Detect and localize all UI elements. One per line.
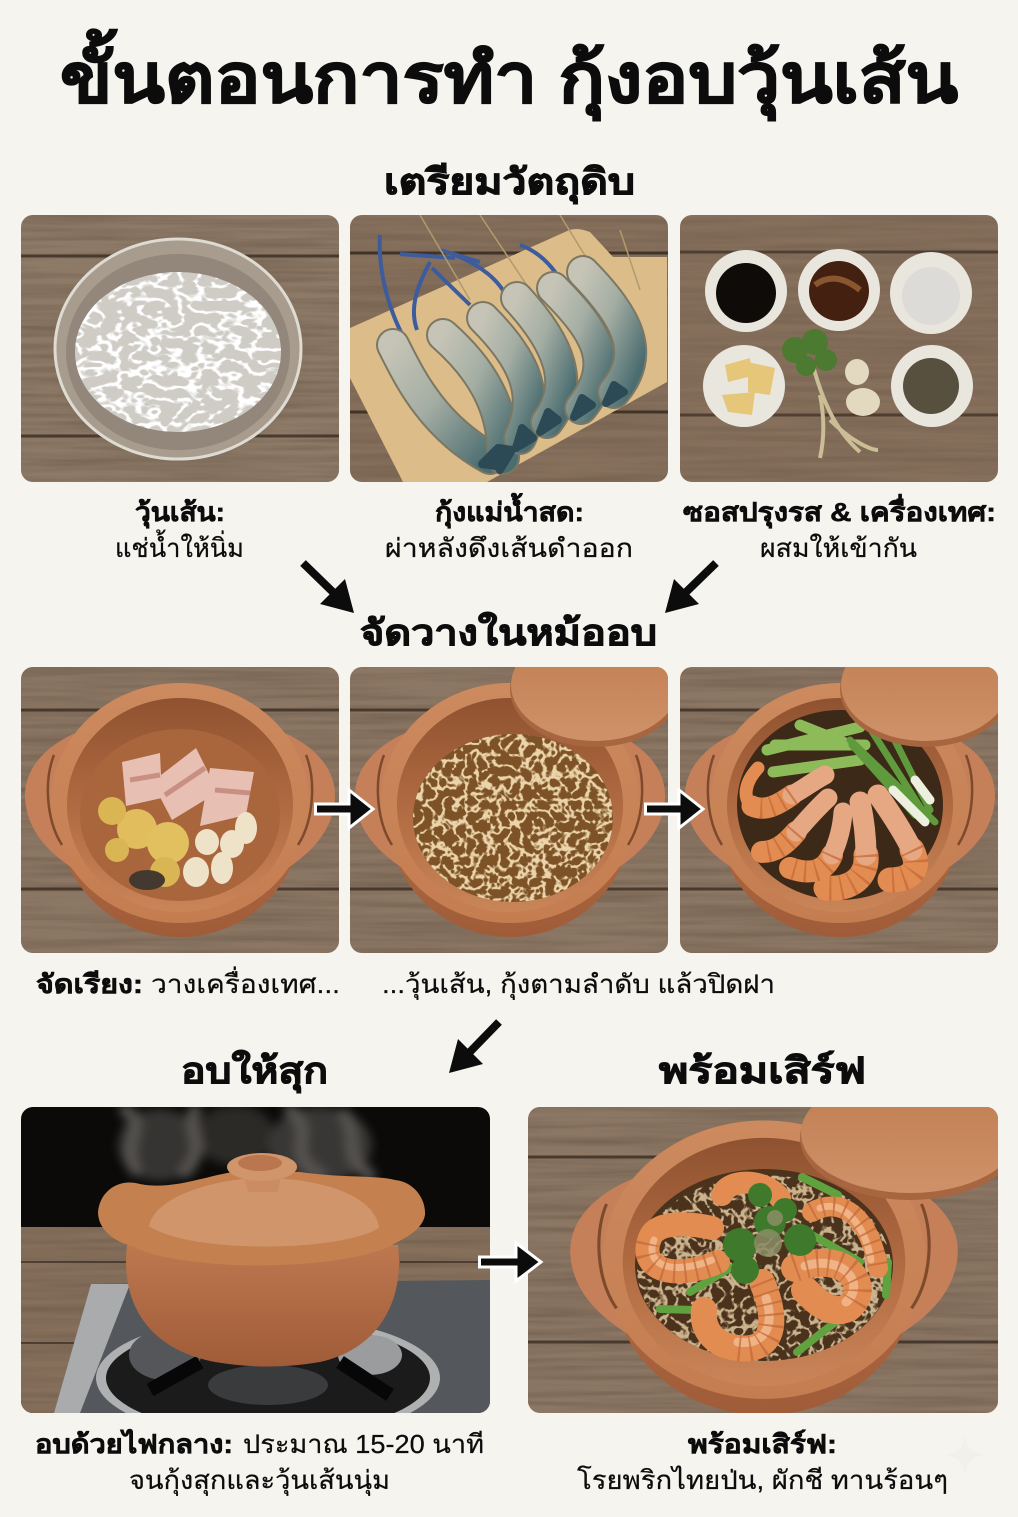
arrow: right to pot step <box>665 563 716 613</box>
arrow: step 1 to step 2 <box>314 790 373 828</box>
arrow: step 2 to step 3 <box>644 790 703 828</box>
panel: prawns in pot <box>680 667 998 953</box>
heading: arrange in pot: จัดวางในหม้ออบ <box>360 611 657 653</box>
label: glass noodles: แช่น้ำให้นิ่ม <box>115 529 244 563</box>
heading: prepare ingredients: เตรียมวัตถุดิบ <box>384 161 635 205</box>
label: sauces: ซอสปรุงรส & เครื่องเทศ: <box>683 493 996 529</box>
panel: pot on stove <box>21 1105 490 1440</box>
panel: glass noodles in bowl <box>21 215 339 482</box>
arrow: to baking <box>449 1022 499 1073</box>
caption: arrange left: วางเครื่องเทศ... <box>151 966 340 999</box>
caption: bake: ประมาณ 15-20 นาที <box>243 1429 484 1459</box>
heading: ready to serve: พร้อมเสิร์ฟ <box>659 1050 866 1091</box>
caption: bake: จนกุ้งสุกและวุ้นเส้นนุ่ม <box>129 1465 390 1496</box>
label: sauces: ผสมให้เข้ากัน <box>760 533 917 563</box>
caption: serve <box>577 1429 948 1495</box>
arrow: left to pot step <box>303 563 354 613</box>
arrow: bake to serve <box>478 1243 541 1281</box>
panel: spices and pork in pot <box>21 667 339 953</box>
caption: arrange left: จัดเรียง: <box>36 969 143 999</box>
label: glass noodles: วุ้นเส้น: <box>135 497 225 529</box>
panel: finished dish <box>528 1107 998 1413</box>
caption: serve: โรยพริกไทยป่น, ผักชี ทานร้อนๆ <box>577 1465 948 1495</box>
caption: arrange left <box>36 966 340 999</box>
label: glass noodles <box>115 497 244 563</box>
heading: bake: อบให้สุก <box>181 1049 328 1094</box>
caption: serve: พร้อมเสิร์ฟ: <box>688 1429 837 1459</box>
panel: sauces and spices <box>680 215 998 482</box>
caption: bake: อบด้วยไฟกลาง: <box>35 1428 233 1459</box>
label: prawns: ผ่าหลังดึงเส้นดำออก <box>385 533 633 563</box>
label: sauces <box>683 493 996 563</box>
caption: bake <box>35 1428 484 1496</box>
icon: faint sparkle watermark <box>945 1435 985 1475</box>
label: prawns: กุ้งแม่น้ำสด: <box>435 492 584 529</box>
title: ขั้นตอนการทำ กุ้งอบวุ้นเส้น <box>60 28 958 121</box>
panel: noodles in pot <box>350 667 668 953</box>
panel: river prawns on board <box>350 215 668 482</box>
label: prawns <box>385 492 633 563</box>
steam <box>118 1105 372 1183</box>
caption: arrange right: ...วุ้นเส้น, กุ้งตามลำดับ แล้วปิดฝา <box>382 969 775 1000</box>
